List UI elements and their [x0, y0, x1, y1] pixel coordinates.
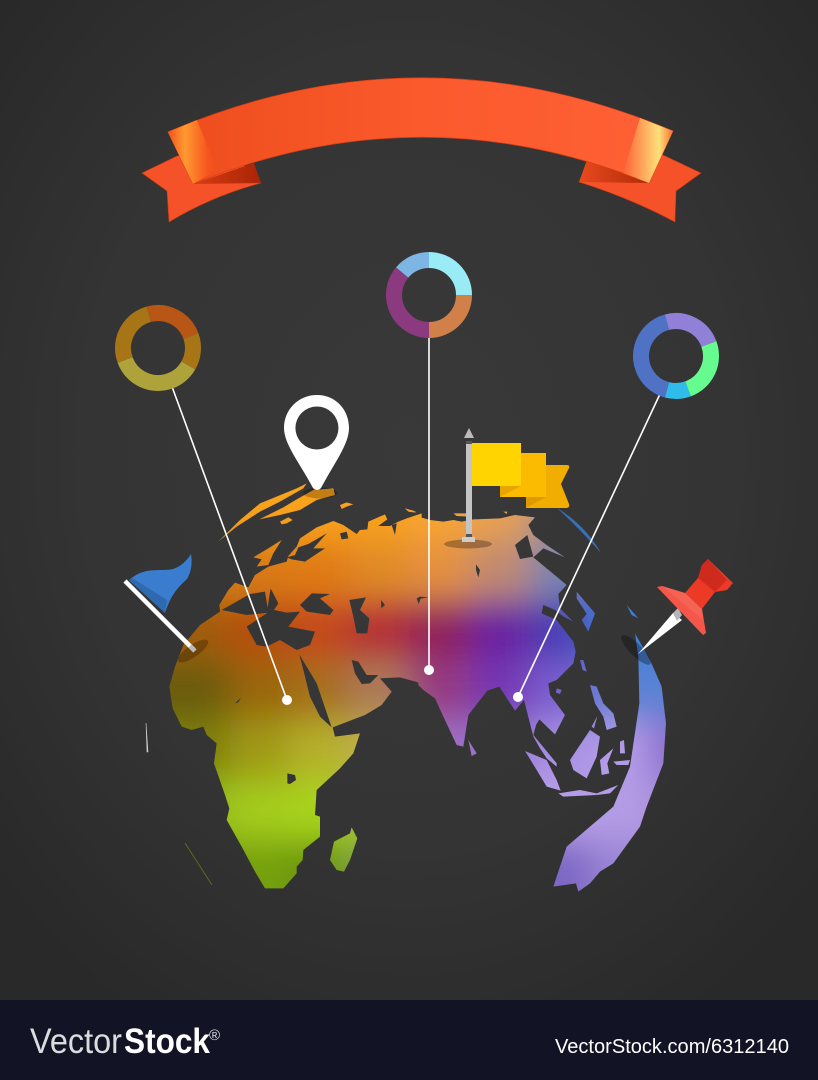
donut chart left — [110, 300, 206, 396]
ribbon right tail — [579, 150, 701, 222]
donut chart center — [380, 246, 478, 344]
VectorStock logo bold part: Stock — [124, 1022, 210, 1061]
connector line center — [424, 337, 434, 675]
VectorStock logo: Vector — [30, 1022, 122, 1061]
registered mark: ® — [209, 1027, 220, 1044]
ribbon main band — [168, 78, 673, 184]
faint map slivers — [146, 508, 601, 885]
connector line left — [172, 388, 292, 705]
icon: blue flag — [125, 554, 211, 666]
connector line right — [513, 394, 660, 702]
stock URL: VectorStock.com/6312140 — [555, 1036, 789, 1058]
donut chart right — [631, 311, 721, 401]
ribbon left fold — [193, 163, 261, 184]
ribbon right highlight — [623, 118, 673, 183]
ribbon banner — [142, 78, 701, 222]
footer bar — [0, 1000, 818, 1080]
ribbon left tail — [142, 150, 261, 222]
ribbon left highlight — [168, 120, 217, 184]
icon: yellow flag — [444, 428, 569, 548]
icon: white map marker — [284, 395, 349, 498]
ribbon right fold — [579, 160, 649, 183]
world map globe — [169, 484, 666, 892]
icon: red push pin — [618, 559, 733, 668]
